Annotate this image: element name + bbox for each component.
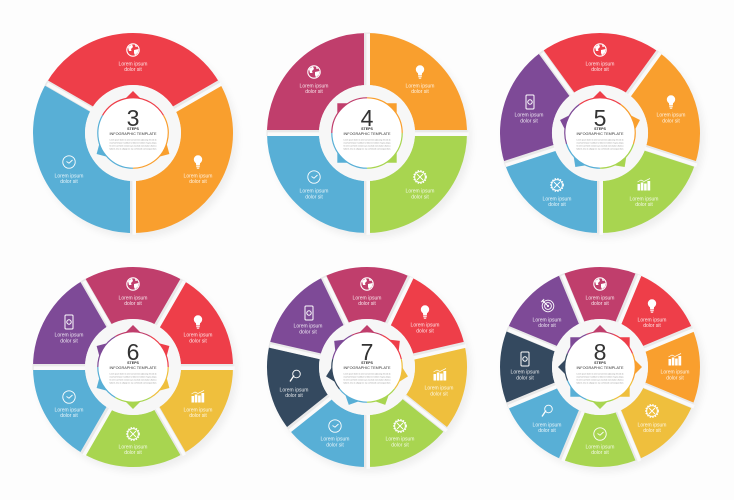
body text xyxy=(344,138,391,150)
center circle xyxy=(85,85,181,181)
icon: phone xyxy=(305,306,313,320)
icon: bulb xyxy=(648,299,656,313)
label: dolor sit xyxy=(591,450,609,456)
icon: bulb xyxy=(194,315,202,329)
label: dolor sit xyxy=(411,89,429,95)
label: Lorem ipsum xyxy=(406,189,434,195)
segment: purple xyxy=(507,40,693,226)
label: Lorem ipsum xyxy=(184,333,212,339)
icon: target xyxy=(541,299,554,312)
body text xyxy=(576,138,624,150)
segment: green xyxy=(507,40,693,226)
label: Lorem ipsum xyxy=(661,370,689,376)
label: dolor sit xyxy=(666,376,684,382)
label: Lorem ipsum xyxy=(294,324,322,330)
label: dolor sit xyxy=(538,428,556,434)
step number: 3 xyxy=(127,105,139,131)
label: dolor sit xyxy=(60,179,78,185)
icon: clock xyxy=(63,391,75,403)
body text: Lorem ipsum dolor sit amet consectetur adipiscing elit sed do xyxy=(344,138,391,142)
label: Lorem ipsum xyxy=(543,197,571,203)
body text: laboris nisi ut aliquip ex ea commodo consequat duis xyxy=(344,382,391,384)
label: dolor sit xyxy=(189,413,207,419)
segment: orange xyxy=(32,32,234,234)
icon: bulb xyxy=(416,65,424,79)
icon: search xyxy=(290,370,300,382)
segment: blue xyxy=(526,59,674,208)
label: dolor sit xyxy=(591,301,609,307)
label: dolor sit xyxy=(189,338,207,344)
label: dolor sit xyxy=(591,67,609,73)
subtitle: INFOGRAPHIC TEMPLATE xyxy=(344,365,391,370)
body text: eiusmod tempor incididunt ut labore et dolore magna aliqua xyxy=(110,142,157,144)
center circle xyxy=(554,321,646,413)
body text: laboris nisi ut aliquip ex ea commodo consequat duis xyxy=(576,382,624,384)
segment: blue xyxy=(503,270,697,464)
body text: Ut enim ad minim veniam quis nostrud exercitation ullamco xyxy=(576,378,624,382)
segment: yellow xyxy=(59,293,212,441)
segment: yellow xyxy=(278,278,456,456)
label: dolor sit xyxy=(124,450,142,456)
subtitle: INFOGRAPHIC TEMPLATE xyxy=(576,365,624,370)
label: Lorem ipsum xyxy=(55,408,83,414)
chart: 3 steps xyxy=(32,32,237,238)
label: dolor sit xyxy=(285,393,303,399)
subtitle: INFOGRAPHIC TEMPLATE xyxy=(344,131,391,136)
icon: bulb xyxy=(667,95,675,109)
label: dolor sit xyxy=(326,442,344,448)
label: dolor sit xyxy=(305,89,323,95)
segment: navy xyxy=(503,270,697,464)
label: Lorem ipsum xyxy=(515,113,543,119)
body text: laboris nisi ut aliquip ex ea commodo consequat duis xyxy=(110,148,157,150)
segment: crimson xyxy=(293,59,441,207)
label: Lorem ipsum xyxy=(119,296,147,302)
segment: crimson xyxy=(32,266,234,468)
label: dolor sit xyxy=(662,118,680,124)
segment: blue xyxy=(32,266,234,468)
step number: 6 xyxy=(127,339,139,365)
heading: STEPS xyxy=(594,127,606,131)
label: dolor sit xyxy=(124,301,142,307)
step number: 8 xyxy=(594,339,606,365)
label: Lorem ipsum xyxy=(55,174,83,180)
segment: crimson xyxy=(503,270,697,464)
label: Lorem ipsum xyxy=(657,113,685,119)
heading: STEPS xyxy=(127,361,139,365)
label: Lorem ipsum xyxy=(300,84,328,90)
step number: 5 xyxy=(594,105,606,131)
label: Lorem ipsum xyxy=(184,408,212,414)
icon: bulb xyxy=(194,155,202,169)
label: dolor sit xyxy=(548,202,566,208)
label: Lorem ipsum xyxy=(119,445,147,451)
segment: purple xyxy=(278,278,456,456)
body text: Lorem ipsum dolor sit amet consectetur adipiscing elit sed do xyxy=(110,372,157,376)
center circle xyxy=(85,319,181,415)
segment: crimson xyxy=(268,268,466,466)
segment: red xyxy=(503,270,697,464)
label: dolor sit xyxy=(430,392,448,398)
label: Lorem ipsum xyxy=(533,423,561,429)
subtitle: INFOGRAPHIC TEMPLATE xyxy=(110,365,157,370)
label: dolor sit xyxy=(643,428,661,434)
segment: green xyxy=(503,270,697,464)
heading: STEPS xyxy=(361,127,373,131)
label: Lorem ipsum xyxy=(586,445,614,451)
segment: green xyxy=(293,59,441,207)
label: dolor sit xyxy=(60,338,78,344)
segment: red xyxy=(32,266,234,468)
icon: globe xyxy=(127,44,139,56)
body text: Lorem ipsum dolor sit amet consectetur adipiscing elit sed do xyxy=(576,372,624,376)
label: Lorem ipsum xyxy=(586,62,614,68)
segment: purple xyxy=(503,270,697,464)
chart: 5 steps xyxy=(497,30,704,238)
label: dolor sit xyxy=(305,194,323,200)
icon: globe xyxy=(127,278,139,290)
segment: orange xyxy=(497,30,703,236)
segment: red xyxy=(32,32,234,234)
body text: Ut enim ad minim veniam quis nostrud exercitation ullamco xyxy=(344,144,391,148)
body text: eiusmod tempor incididunt ut labore et dolore magna aliqua xyxy=(110,376,157,378)
label: dolor sit xyxy=(538,323,556,329)
label: Lorem ipsum xyxy=(353,296,381,302)
icon: chart xyxy=(192,390,204,402)
label: dolor sit xyxy=(60,413,78,419)
icon: phone xyxy=(65,315,73,329)
icon: globe xyxy=(308,66,320,78)
icon: chart xyxy=(668,354,681,366)
segment: red xyxy=(497,30,703,236)
segment: purple xyxy=(55,293,207,441)
label: Lorem ipsum xyxy=(411,323,439,329)
icon: search xyxy=(542,405,552,416)
icon: clock xyxy=(594,428,606,440)
label: Lorem ipsum xyxy=(511,370,539,376)
body text xyxy=(576,372,624,384)
label: Lorem ipsum xyxy=(533,318,561,324)
icon: bulb xyxy=(421,305,429,319)
icon: gear xyxy=(394,420,406,432)
icon: phone xyxy=(526,95,534,109)
label: dolor sit xyxy=(635,202,653,208)
body text: Ut enim ad minim veniam quis nostrud exercitation ullamco xyxy=(576,144,624,148)
segment: red xyxy=(268,268,466,466)
icon: clock xyxy=(308,171,320,183)
chart: 4 steps xyxy=(266,32,471,238)
icon: gear xyxy=(414,171,426,183)
label: Lorem ipsum xyxy=(55,333,83,339)
heading: STEPS xyxy=(594,361,606,365)
label: dolor sit xyxy=(643,323,661,329)
label: Lorem ipsum xyxy=(280,388,308,394)
segment: orange xyxy=(293,59,441,207)
center circle xyxy=(318,318,416,416)
body text: laboris nisi ut aliquip ex ea commodo consequat duis xyxy=(110,382,157,384)
label: Lorem ipsum xyxy=(638,423,666,429)
icon: clock xyxy=(329,420,341,432)
label: dolor sit xyxy=(411,194,429,200)
label: Lorem ipsum xyxy=(386,437,414,443)
step number: 7 xyxy=(361,339,373,365)
segment: navy xyxy=(263,263,471,471)
icon: gear xyxy=(551,179,563,191)
body text: Lorem ipsum dolor sit amet consectetur adipiscing elit sed do xyxy=(576,138,624,142)
label: dolor sit xyxy=(124,67,142,73)
label: dolor sit xyxy=(520,118,538,124)
icon: globe xyxy=(594,278,606,290)
icon: chart xyxy=(434,368,446,380)
label: dolor sit xyxy=(416,328,434,334)
chart: 6 steps xyxy=(32,266,237,472)
segment: green xyxy=(32,266,234,468)
label: dolor sit xyxy=(516,376,534,382)
body text: Lorem ipsum dolor sit amet consectetur adipiscing elit sed do xyxy=(344,372,391,376)
subtitle: INFOGRAPHIC TEMPLATE xyxy=(110,131,157,136)
body text xyxy=(110,372,157,384)
segment: yellow xyxy=(503,270,697,464)
body text: eiusmod tempor incididunt ut labore et dolore magna aliqua xyxy=(576,376,624,378)
body text: laboris nisi ut aliquip ex ea commodo consequat duis xyxy=(576,148,624,150)
label: Lorem ipsum xyxy=(638,318,666,324)
heading: STEPS xyxy=(361,361,373,365)
icon: gear xyxy=(127,428,139,440)
label: Lorem ipsum xyxy=(406,84,434,90)
segment: blue xyxy=(293,59,441,207)
segment: orange xyxy=(503,270,697,464)
body text: Lorem ipsum dolor sit amet consectetur adipiscing elit sed do xyxy=(110,138,157,142)
step number: 4 xyxy=(361,105,374,131)
center circle xyxy=(332,98,402,168)
body text: eiusmod tempor incididunt ut labore et dolore magna aliqua xyxy=(576,142,624,144)
icon: gear xyxy=(646,405,658,417)
chart: 8 steps xyxy=(503,270,704,472)
body text: Ut enim ad minim veniam quis nostrud exercitation ullamco xyxy=(110,144,157,148)
body text: Ut enim ad minim veniam quis nostrud exercitation ullamco xyxy=(110,378,157,382)
segment: blue xyxy=(293,293,441,448)
body text: laboris nisi ut aliquip ex ea commodo consequat duis xyxy=(344,148,391,150)
body text: eiusmod tempor incididunt ut labore et dolore magna aliqua xyxy=(344,376,391,378)
label: Lorem ipsum xyxy=(184,174,212,180)
body text: eiusmod tempor incididunt ut labore et dolore magna aliqua xyxy=(344,142,391,144)
label: dolor sit xyxy=(358,301,376,307)
icon: chart xyxy=(638,178,650,190)
center circle xyxy=(551,84,649,182)
chart: 7 steps xyxy=(263,263,471,472)
segment: green xyxy=(263,263,471,471)
body text xyxy=(344,372,391,384)
icon: globe xyxy=(594,44,606,56)
icon: globe xyxy=(361,278,373,290)
icon: phone xyxy=(521,352,529,366)
label: Lorem ipsum xyxy=(119,62,147,68)
label: dolor sit xyxy=(391,442,409,448)
heading: STEPS xyxy=(127,127,139,131)
label: Lorem ipsum xyxy=(425,386,453,392)
segment: blue xyxy=(55,59,207,207)
label: dolor sit xyxy=(189,179,207,185)
label: dolor sit xyxy=(299,330,317,336)
body text xyxy=(110,138,157,150)
label: Lorem ipsum xyxy=(300,189,328,195)
body text: Ut enim ad minim veniam quis nostrud exercitation ullamco xyxy=(344,378,391,382)
label: Lorem ipsum xyxy=(630,197,658,203)
subtitle: INFOGRAPHIC TEMPLATE xyxy=(576,131,624,136)
label: Lorem ipsum xyxy=(321,437,349,443)
icon: clock xyxy=(63,156,75,168)
label: Lorem ipsum xyxy=(586,296,614,302)
